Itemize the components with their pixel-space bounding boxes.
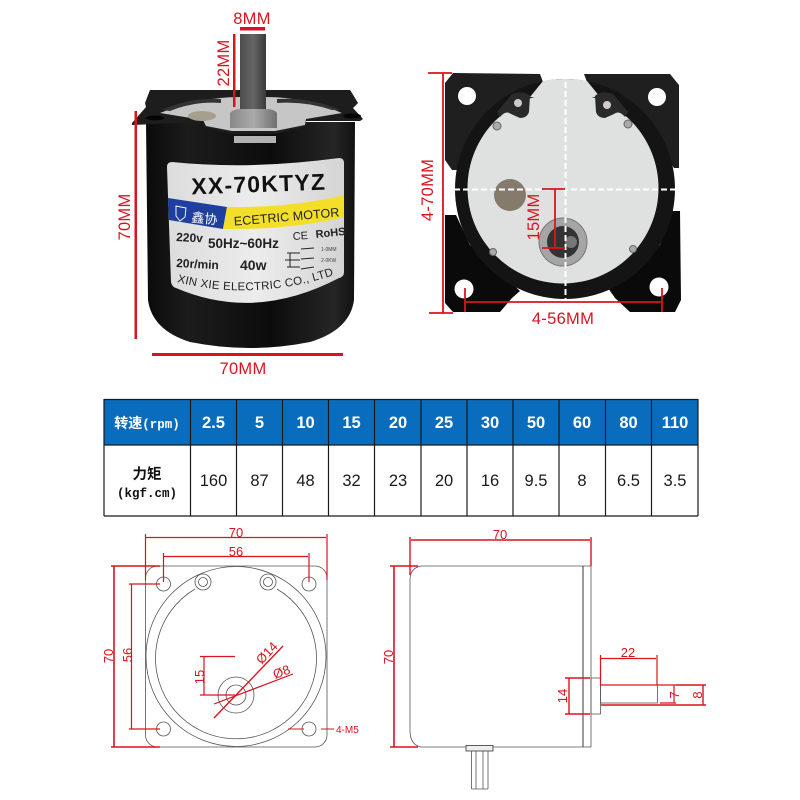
ratings: 220v xyxy=(176,230,204,245)
subtitle: ECETRIC MOTOR xyxy=(233,205,340,229)
dimension: 15MM: 15MM xyxy=(525,193,543,241)
product label xyxy=(167,158,346,303)
torque row: 9.5 xyxy=(525,472,547,490)
dimension: diameter 14 xyxy=(214,639,283,718)
dimension: 4-M5 xyxy=(288,725,359,736)
dimension: 70 height: 70 xyxy=(381,650,396,664)
outer circle xyxy=(146,566,326,746)
motor photo xyxy=(132,34,363,348)
rivet xyxy=(494,179,526,211)
header row: 5 xyxy=(255,414,264,432)
boss xyxy=(591,678,600,714)
side drawing xyxy=(381,527,706,789)
mounting flange xyxy=(132,90,363,134)
shaft hole xyxy=(539,218,587,266)
header row: 2.5 xyxy=(202,414,225,432)
dimension: 4-70MM: 4-70MM xyxy=(419,159,437,221)
dimension: 4-56MM xyxy=(465,288,662,328)
model number: XX-70KTYZ xyxy=(191,169,327,199)
product label: XIN XIE ELECTRIC CO., LTD xyxy=(177,268,332,290)
torque row xyxy=(117,466,686,501)
shield icon xyxy=(176,206,186,221)
dimension: 8MM: 8MM xyxy=(233,10,271,28)
motor dimensions xyxy=(116,10,343,378)
wiring icon xyxy=(285,248,314,269)
header row: 110 xyxy=(662,414,688,432)
torque row: 6.5 xyxy=(617,472,640,490)
header row: 80 xyxy=(619,414,638,432)
light disc xyxy=(468,92,658,284)
product label: 40w xyxy=(240,257,267,273)
dimension: 7 xyxy=(600,685,682,703)
front drawing xyxy=(101,525,359,747)
dimension: 4-M5: 4-M5 xyxy=(336,725,359,736)
flange hole right xyxy=(343,114,361,118)
dimension: 8 xyxy=(601,685,706,705)
dimension: 56 height xyxy=(120,584,160,729)
shaft collar xyxy=(230,109,277,128)
torque row: 8 xyxy=(577,472,587,490)
dimension: diameter 14: Ø14 xyxy=(253,639,281,667)
torque row: (kgf.cm) xyxy=(117,487,177,501)
motor body xyxy=(146,122,355,348)
output shaft xyxy=(240,34,266,110)
table header fill xyxy=(104,399,698,445)
product label: 20r/min xyxy=(176,256,219,272)
header row: 60 xyxy=(573,414,591,432)
dimension: 14 xyxy=(555,678,590,714)
connector xyxy=(466,746,493,751)
outline xyxy=(146,566,327,747)
header row xyxy=(114,414,688,432)
dimension: diameter 8: Ø8 xyxy=(271,662,292,682)
dimension: 56 width xyxy=(164,544,309,582)
wiring note: 1-0MM xyxy=(321,247,337,253)
brand: 鑫协 xyxy=(191,210,218,227)
header row: 15 xyxy=(342,414,361,432)
torque row: 32 xyxy=(342,472,361,490)
lug holes xyxy=(514,99,522,107)
silver end plate xyxy=(160,97,342,131)
specification table xyxy=(104,399,698,516)
front tab xyxy=(234,136,276,143)
shaft circles xyxy=(218,677,254,713)
torque row: 16 xyxy=(481,472,499,490)
disc top cap xyxy=(530,79,600,97)
dimension: diameter 8 xyxy=(214,662,293,704)
upper dark arcs xyxy=(162,99,340,111)
header row: 10 xyxy=(296,414,315,432)
dimension: 14: 14 xyxy=(555,689,570,703)
header row: 转速(rpm) xyxy=(114,415,180,432)
holes xyxy=(156,574,316,736)
dimension: 7: 7 xyxy=(667,691,682,699)
wiring note 2: 2-0KW xyxy=(321,258,337,264)
dimension: 70 width xyxy=(146,525,327,580)
inner circle with notches xyxy=(156,589,316,739)
dimension: 22 xyxy=(600,645,657,685)
dimension: 70MM width: 70MM xyxy=(219,360,267,378)
dimension: 15: 15 xyxy=(192,670,207,684)
screws xyxy=(490,120,636,256)
yellow band xyxy=(223,195,344,229)
dimension: 70 height xyxy=(101,566,160,747)
dimension: 56 height: 56 xyxy=(120,648,135,662)
torque row: 23 xyxy=(389,472,407,490)
dimension: 8: 8 xyxy=(690,691,705,699)
center lines xyxy=(454,188,675,190)
dimension: 15MM xyxy=(525,189,565,248)
dimension: 22: 22 xyxy=(621,645,635,660)
dimension: 4-70MM xyxy=(419,73,453,313)
black ring xyxy=(455,79,675,299)
dimension: 4-56MM: 4-56MM xyxy=(532,310,594,328)
header row: 50 xyxy=(527,414,545,432)
wires xyxy=(472,751,488,789)
torque row: 48 xyxy=(296,472,315,490)
flange line xyxy=(582,566,584,747)
shaft xyxy=(600,685,658,703)
dimension: 70 width: 70 xyxy=(229,525,243,540)
dimension: 56 width: 56 xyxy=(229,544,243,559)
flange hole left xyxy=(146,116,164,120)
dimension: 70MM width xyxy=(152,353,343,378)
torque row: 3.5 xyxy=(664,472,686,490)
dimension: 70 width: 70 xyxy=(493,527,507,542)
corner plates xyxy=(445,73,543,170)
dimension: 70MM height: 70MM xyxy=(116,193,134,241)
torque row: 87 xyxy=(250,472,269,490)
dimension: 15 xyxy=(192,656,235,695)
header row: 25 xyxy=(435,414,453,432)
blue band xyxy=(168,198,227,229)
left lug xyxy=(497,92,530,118)
certification: CE xyxy=(292,230,308,243)
header row: 30 xyxy=(481,414,499,432)
dimension: 70 height: 70 xyxy=(101,649,116,663)
dimension: 22MM xyxy=(215,34,236,107)
product label: RoHS xyxy=(315,226,346,241)
maker xyxy=(177,274,337,290)
dimension: 22MM: 22MM xyxy=(215,39,233,87)
base photo xyxy=(445,73,681,312)
table grid xyxy=(104,399,698,516)
body outline xyxy=(410,566,591,747)
dimension: 70 width xyxy=(410,527,591,575)
mounting holes xyxy=(458,87,476,105)
torque row: 20 xyxy=(435,472,453,490)
rivet xyxy=(188,111,216,121)
header row: 20 xyxy=(389,414,407,432)
right lug xyxy=(595,92,628,118)
dimension: 70 height xyxy=(381,566,418,747)
base dimensions xyxy=(419,73,662,328)
product label: 50Hz~60Hz xyxy=(208,236,279,251)
torque row: 力矩 xyxy=(132,466,162,483)
torque row: 160 xyxy=(200,472,227,490)
